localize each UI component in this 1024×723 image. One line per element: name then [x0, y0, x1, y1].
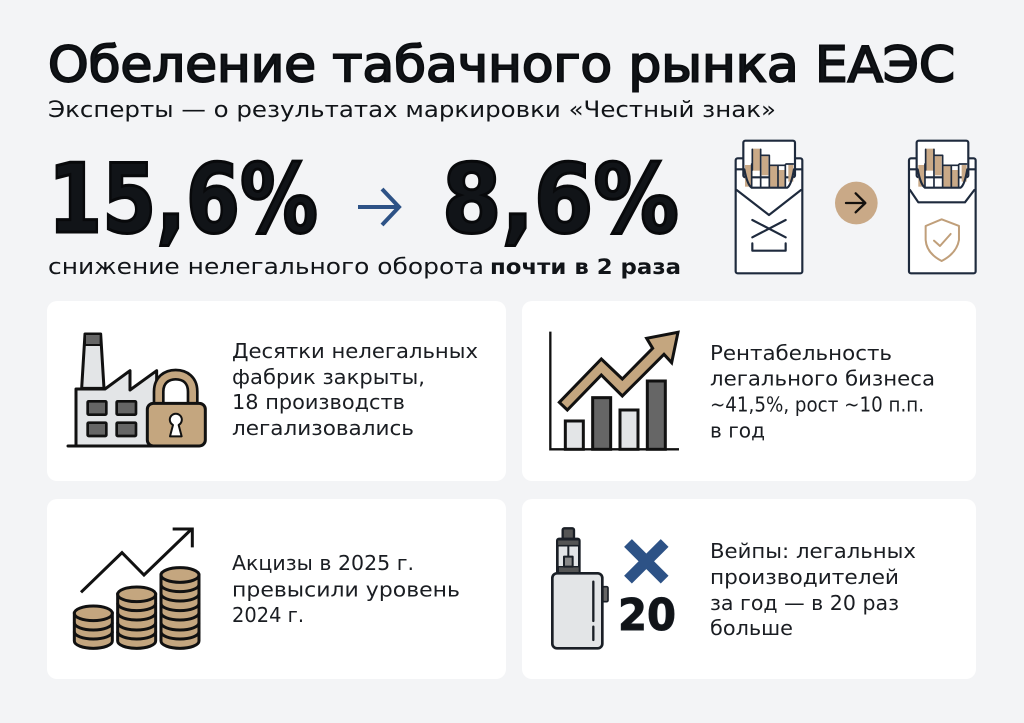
text: vapes: Вейпы: легальных [710, 539, 916, 563]
text: factories: Десятки нелегальных [232, 339, 478, 363]
panel: profitability [522, 301, 976, 481]
icon: factory with lock [68, 334, 205, 446]
caption: reduction: почти в 2 раза [490, 255, 681, 279]
icon: legal pack with shield [909, 141, 976, 273]
caption: reduction [48, 255, 681, 280]
text: vapes: производителей [710, 565, 899, 589]
text: profitability: ~41,5%, рост ~10 п.п. [710, 392, 924, 416]
icon: coin stacks with arrow [74, 529, 199, 648]
text: excise: 2024 г. [232, 603, 304, 627]
text: vapes: больше [710, 616, 793, 640]
text: profitability: Рентабельность [710, 341, 892, 365]
text: excise: превысили уровень [232, 578, 460, 602]
icon: vape device [552, 528, 608, 648]
icon: multiply sign [628, 543, 665, 580]
text: excise: Акцизы в 2025 г. [232, 551, 414, 575]
text: factories: фабрик закрыты, [232, 365, 425, 389]
text: factories: 18 производств [232, 390, 405, 414]
panel: factories [47, 301, 506, 481]
number: 20: 20 [618, 590, 676, 641]
icon: cigarette packs with arrow [736, 141, 976, 273]
text: profitability [710, 341, 935, 442]
icon: illegal pack [736, 141, 802, 273]
icon: growth bar chart [550, 332, 679, 449]
panel: vapes [522, 499, 976, 679]
text: factories [232, 339, 478, 440]
caption: reduction: снижение нелегального оборота [48, 255, 484, 280]
text: profitability: легального бизнеса [710, 366, 935, 390]
text: profitability: в год [710, 418, 765, 442]
arrow: decrease [358, 189, 399, 225]
panel: excise [47, 499, 506, 679]
title: Обеление табачного рынка ЕАЭС [48, 36, 955, 94]
statistic: 8,6%: 8,6% [442, 145, 679, 255]
text: factories: легализовались [232, 416, 414, 440]
text: vapes: за год — в 20 раз [710, 591, 899, 615]
icon: arrow circle [835, 182, 878, 224]
text: excise [232, 551, 460, 627]
subtitle: Эксперты — о результатах маркировки «Честный знак» [48, 98, 776, 123]
statistic: 15,6%: 15,6% [48, 145, 318, 255]
text: vapes [710, 539, 916, 640]
